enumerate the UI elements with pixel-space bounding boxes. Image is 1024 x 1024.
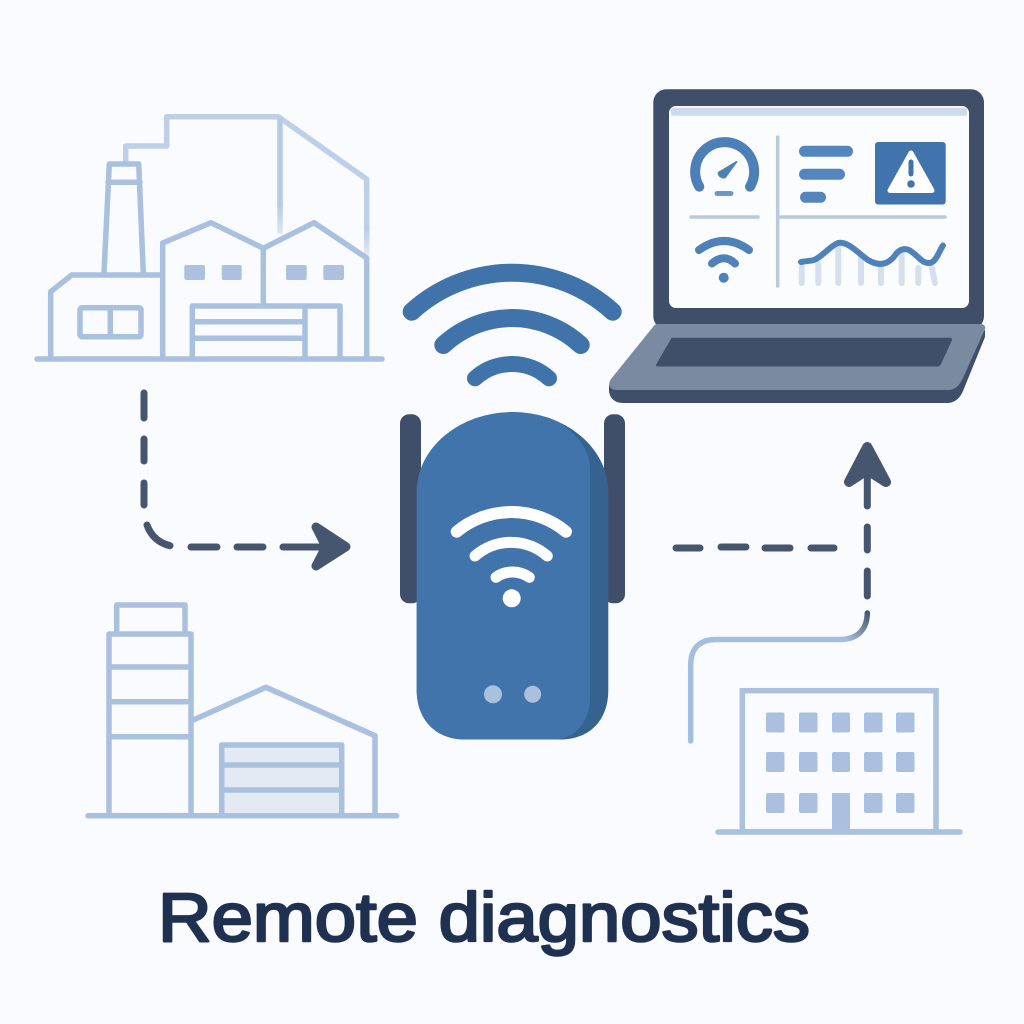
antennas	[400, 414, 625, 603]
alert widget	[875, 142, 946, 204]
icon: office building bottom right	[718, 691, 960, 832]
device body	[417, 412, 590, 740]
device body shadow	[417, 412, 608, 740]
icon: laptop dashboard	[609, 89, 985, 403]
arrow: extender to laptop	[676, 447, 886, 596]
laptop base	[609, 328, 985, 403]
icon: wifi signal above extender	[412, 273, 613, 378]
gauge widget	[695, 142, 754, 194]
keyboard	[656, 338, 952, 366]
laptop screen	[669, 106, 969, 308]
line chart widget	[801, 243, 943, 283]
icon: warehouse bottom left	[88, 605, 397, 816]
device wifi symbol	[457, 512, 566, 577]
wifi widget	[699, 241, 749, 283]
laptop lid	[653, 89, 984, 329]
arrow: factory to extender	[144, 393, 346, 566]
icon: large factory top left	[37, 117, 382, 359]
status lights	[484, 685, 502, 703]
connector: office to laptop path	[691, 613, 867, 741]
icon: wifi extender device	[400, 412, 625, 740]
text lines widget	[804, 151, 848, 197]
title: Remote diagnostics	[158, 879, 810, 956]
